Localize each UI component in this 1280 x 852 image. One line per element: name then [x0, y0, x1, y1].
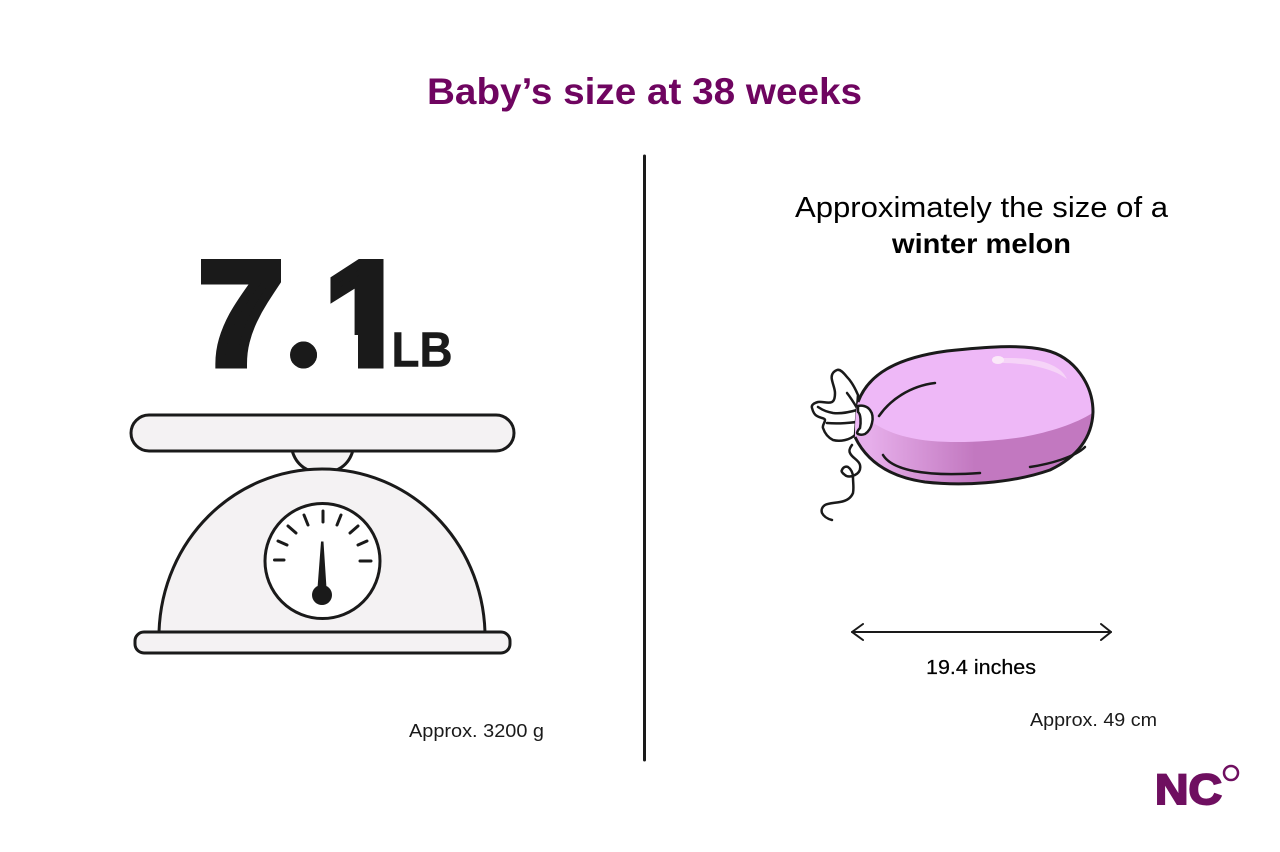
comparison heading	[795, 192, 1169, 259]
title: Baby’s size at 38 weeks	[427, 71, 862, 112]
length in inches: 19.4 inches	[926, 657, 1036, 679]
size arrow	[852, 624, 1111, 640]
melon body	[855, 347, 1093, 484]
scale dial	[265, 504, 380, 618]
weight number: 7	[198, 232, 284, 395]
length in centimetres: Approx. 49 cm	[1030, 709, 1157, 730]
weight number second digit: 1	[325, 232, 406, 395]
weight figure	[201, 259, 451, 368]
comparison heading: winter melon	[891, 228, 1071, 259]
dial ticks	[274, 511, 371, 561]
icon: kitchen scale	[131, 415, 514, 653]
decimal point: .	[278, 198, 331, 410]
melon contour lines	[879, 383, 1085, 474]
melon stem and leaves	[812, 370, 862, 520]
scale neck	[292, 450, 353, 473]
scale base	[135, 632, 510, 653]
dial needle	[318, 542, 326, 588]
melon gloss	[1003, 358, 1067, 379]
logo: NC	[1155, 766, 1222, 814]
scale body	[159, 469, 485, 632]
melon knot	[857, 406, 873, 435]
comparison heading: Approximately the size of a	[795, 192, 1169, 224]
center divider	[643, 156, 646, 760]
melon shaded underside	[855, 413, 1092, 484]
scale platform	[131, 415, 514, 451]
weight unit: LB	[392, 324, 452, 378]
weight in grams: Approx. 3200 g	[409, 720, 544, 741]
icon: winter melon	[812, 347, 1093, 520]
melon outline	[855, 347, 1093, 484]
